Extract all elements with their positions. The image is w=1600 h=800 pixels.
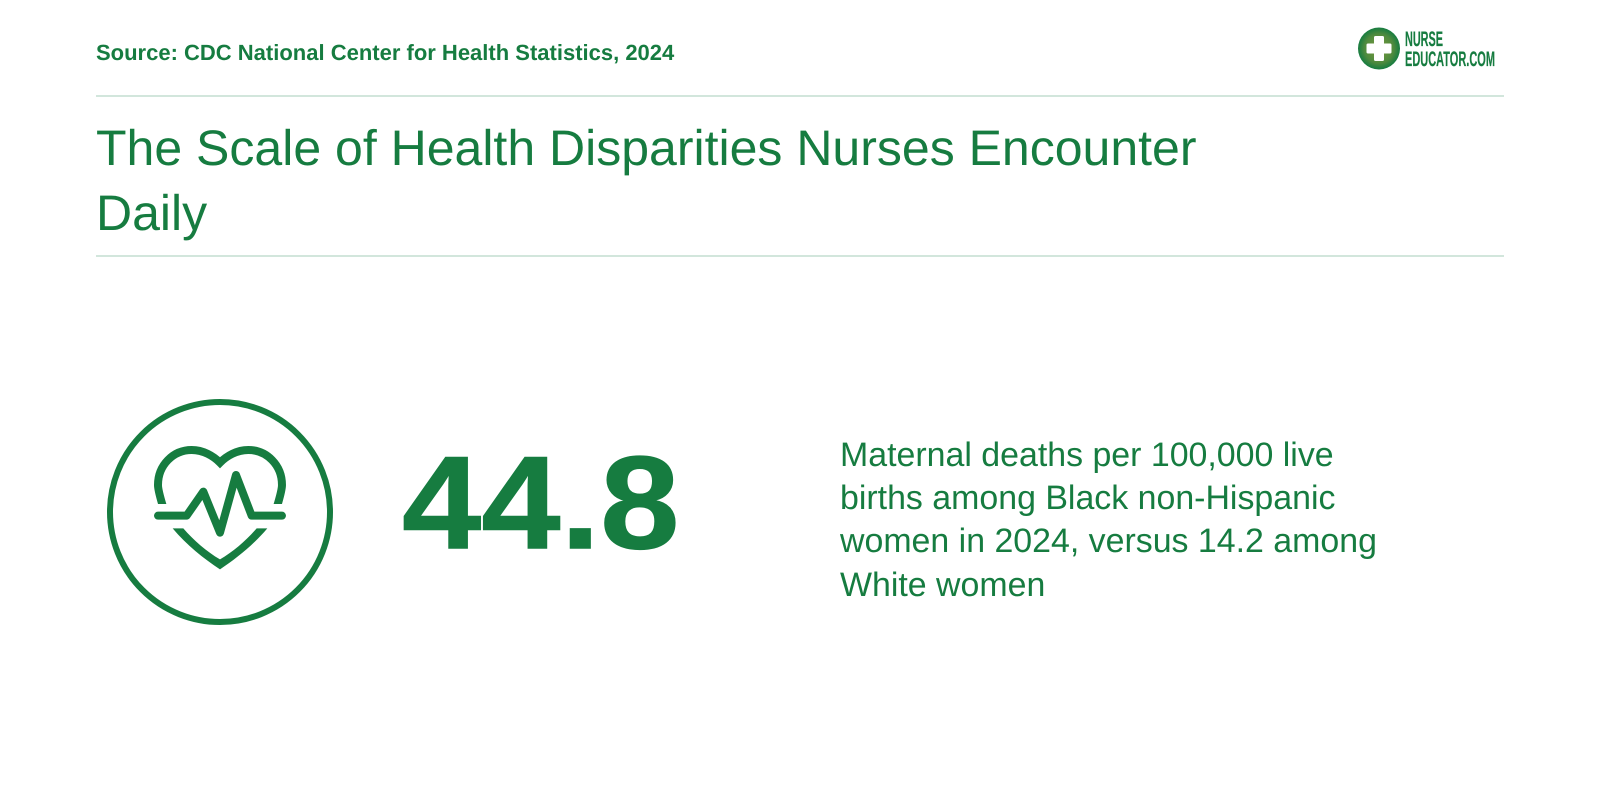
title: Daily <box>96 185 207 241</box>
icon: heart with pulse in circle <box>107 399 333 625</box>
title: The Scale of Health Disparities Nurses Encounter <box>96 120 1197 176</box>
big number: 44.8 <box>402 429 679 577</box>
description: Maternal deaths per 100,000 live <box>840 436 1334 474</box>
description <box>840 436 1377 604</box>
logo: NurseEducator.com <box>1358 28 1495 71</box>
description: women in 2024, versus 14.2 among <box>840 522 1377 560</box>
source line: Source: CDC National Center for Health Statistics, 2024 <box>96 40 674 65</box>
logo: NurseEducator.com: NURSE <box>1405 28 1443 51</box>
description: births among Black non-Hispanic <box>840 479 1335 517</box>
description: White women <box>840 566 1045 604</box>
title <box>96 120 1197 241</box>
